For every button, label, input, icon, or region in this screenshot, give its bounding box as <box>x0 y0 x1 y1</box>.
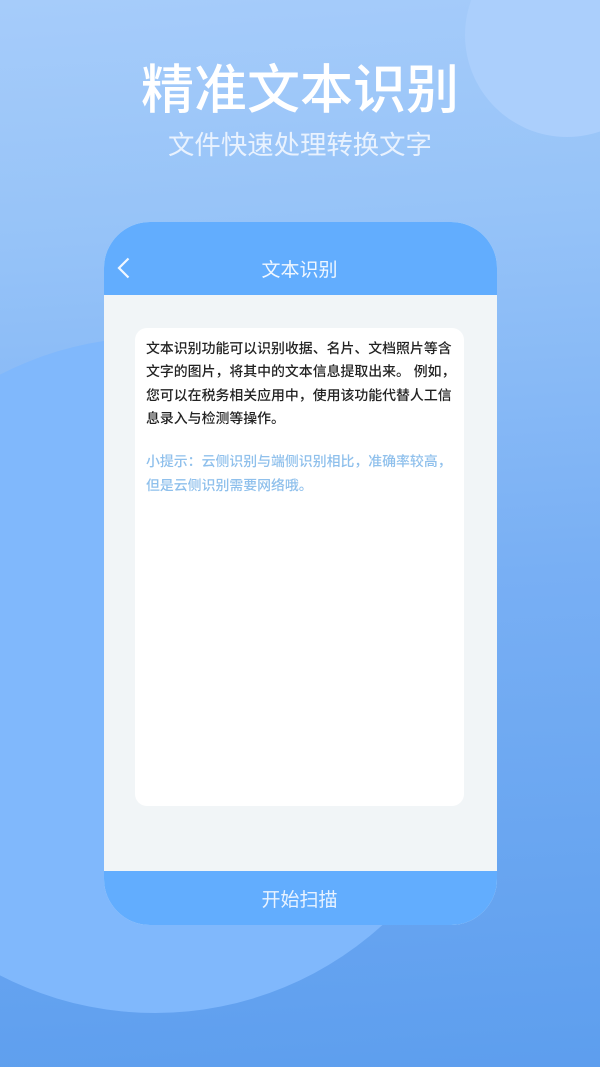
body text: 文字的图片，将其中的文本信息提取出来。 例如， <box>146 363 455 379</box>
tip text <box>146 453 452 493</box>
subtitle: 文件快速处理转换文字 <box>168 130 432 160</box>
background circle: top right <box>465 0 600 137</box>
tip text: 但是云侧识别需要网络哦。 <box>146 477 313 493</box>
header title: 文本识别 <box>261 260 338 281</box>
button: start scan: 开始扫描 <box>261 890 338 911</box>
panel: description card <box>135 328 464 806</box>
title: 精准文本识别 <box>141 61 459 120</box>
header bar <box>104 222 497 295</box>
body text: 文本识别功能可以识别收据、名片、文档照片等含 <box>146 340 452 356</box>
tip text: 小提示：云侧识别与端侧识别相比，准确率较高， <box>146 453 452 469</box>
button: start scan <box>104 871 497 925</box>
background circle: large lower left <box>0 337 493 1013</box>
body text <box>146 340 455 426</box>
body text: 息录入与检测等操作。 <box>146 410 285 426</box>
icon: back arrow <box>118 258 130 278</box>
panel: phone screen <box>104 222 497 925</box>
body text: 您可以在税务相关应用中，使用该功能代替人工信 <box>146 387 452 403</box>
